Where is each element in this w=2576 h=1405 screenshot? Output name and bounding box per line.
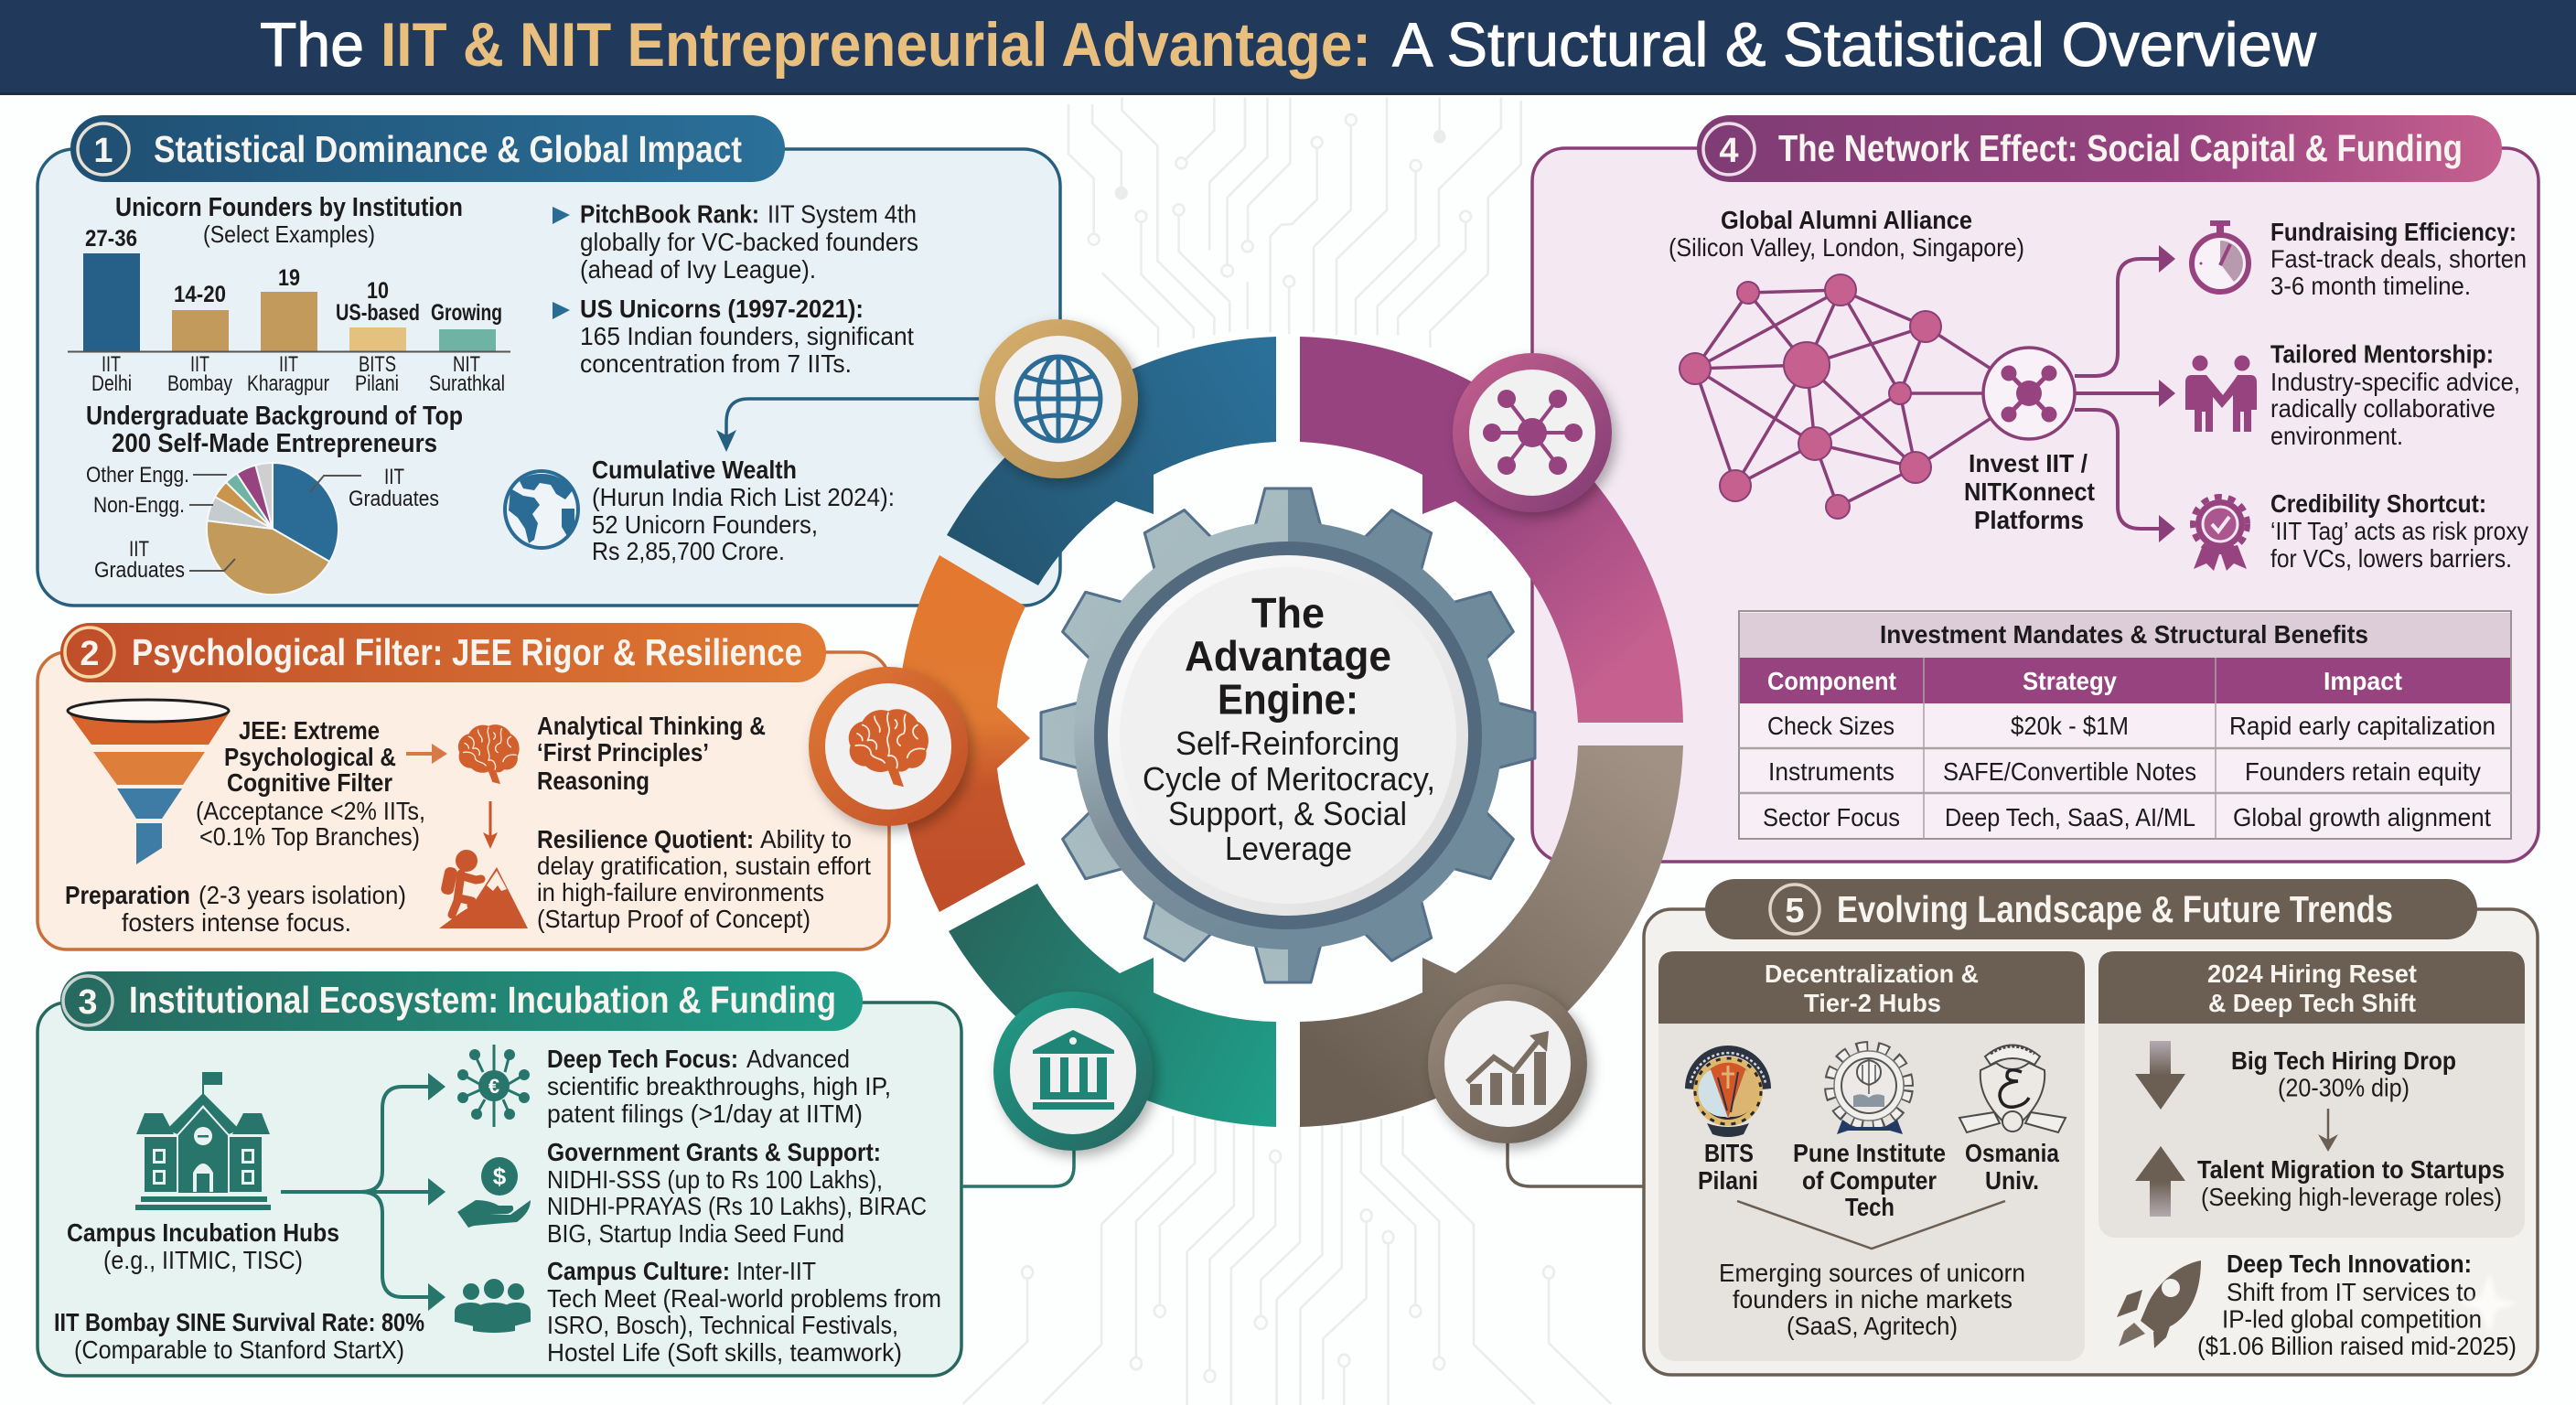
segment: evolving (brown): [1300, 745, 1683, 1127]
table: investment mandates: Component: [1767, 667, 1896, 695]
arrow: talent up: [2135, 1146, 2185, 1217]
table: investment mandates: $20k - $1M: [2011, 712, 2129, 740]
sub-panel: 2024 hiring reset: 2024 Hiring Reset: [2207, 960, 2417, 988]
heading pill 5: [1705, 879, 2477, 939]
bar chart: unicorn founders by institution: Delhi: [91, 371, 132, 396]
text block: global alumni alliance: Global Alumni Alliance: [1721, 206, 1972, 234]
heading pill 3: 3: [78, 983, 98, 1022]
text block: JEE filter: [196, 716, 425, 851]
icon: rosette badge: [2193, 497, 2248, 571]
connector lines: badges to lower panels: [961, 1143, 1644, 1186]
text block: deep tech focus: Advanced: [746, 1045, 850, 1073]
panel 4: the network effect: [1532, 115, 2538, 862]
title banner: [0, 0, 2576, 95]
bar chart: unicorn founders by institution: US-based: [336, 300, 420, 326]
text block: tailored mentorship: Tailored Mentorship:: [2270, 340, 2494, 368]
pie chart: undergraduate background: Undergraduate Background of Top: [86, 402, 463, 431]
text: institution names: Tech: [1845, 1193, 1894, 1221]
text block: preparation: fosters intense focus.: [122, 908, 351, 937]
text block: fundraising efficiency: [2270, 218, 2527, 300]
table: investment mandates: Investment Mandates & Structural Benefits: [1880, 620, 2368, 649]
heading pill 2: 2: [80, 635, 100, 673]
text block: government grants: [547, 1138, 927, 1248]
text block: cumulative wealth: (Hurun India Rich List 2024):: [592, 483, 895, 511]
text block: invest IIT platforms: Invest IIT /: [1969, 449, 2088, 477]
text block: US unicorns: concentration from 7 IITs.: [580, 349, 852, 378]
arrow: globe badge to cumulative wealth: [716, 399, 983, 452]
text block: PitchBook rank: [553, 199, 918, 284]
badge: network: [1453, 353, 1612, 512]
bar chart: unicorn founders by institution: IIT: [279, 352, 298, 377]
icon: money in hand: [457, 1157, 531, 1228]
text block: credibility shortcut: Credibility Shortcut:: [2270, 489, 2486, 518]
text block: fundraising efficiency: Fundraising Efficiency:: [2270, 218, 2517, 246]
heading pill 2: [60, 623, 826, 682]
text block: preparation: Preparation: [65, 881, 190, 909]
pie chart: undergraduate background: Graduates: [94, 558, 185, 583]
segment: institutional (green): [949, 884, 1276, 1127]
bar chart: unicorn founders by institution: Bombay: [167, 371, 232, 396]
text: emerging sources: [1719, 1259, 2025, 1340]
text block: campus incubation hubs: (e.g., IITMIC, TISC): [103, 1246, 303, 1274]
bar chart: unicorn founders by institution: 19: [278, 265, 300, 291]
icon: campus building: [135, 1072, 271, 1210]
badge: bank: [993, 992, 1153, 1151]
text block: PitchBook rank: (ahead of Ivy League).: [580, 255, 816, 284]
text block: credibility shortcut: ‘IIT Tag’ acts as risk proxy: [2270, 517, 2528, 545]
text block: analytical thinking: Reasoning: [537, 767, 649, 795]
text block: SINE survival rate: (Comparable to Stanford StartX): [74, 1335, 404, 1364]
pie chart: undergraduate background: 200 Self-Made Entrepreneurs: [112, 429, 437, 458]
table: investment mandates: Strategy: [2023, 667, 2117, 695]
text block: government grants: BIG, Startup India Seed Fund: [547, 1219, 844, 1248]
bar chart: unicorn founders by institution: IIT: [190, 352, 209, 377]
bar chart: unicorn founders by institution: Unicorn Founders by Institution: [115, 193, 463, 222]
badge: globe: [979, 319, 1138, 478]
text block: preparation: [65, 881, 406, 937]
pie chart: undergraduate background: Graduates: [349, 487, 439, 511]
logo: BITS Pilani: [1685, 1046, 1771, 1137]
heading pill 4: 4: [1719, 132, 1739, 170]
panel 1: statistical dominance: [38, 115, 1060, 606]
sub-panel: 2024 hiring reset: [2098, 951, 2525, 1238]
text block: cumulative wealth: Cumulative Wealth: [592, 456, 797, 484]
table: investment mandates: Sector Focus: [1763, 803, 1900, 831]
text block: deep tech innovation: Shift from IT services to: [2227, 1278, 2476, 1306]
central gear: [1041, 488, 1535, 982]
table: investment mandates: Deep Tech, SaaS, AI/ML: [1945, 803, 2195, 831]
text block: tailored mentorship: [2270, 340, 2520, 450]
text block: SINE survival rate: IIT Bombay SINE Survival Rate: 80%: [54, 1308, 424, 1336]
text block: campus culture: Campus Culture:: [547, 1257, 730, 1285]
icon: deep tech network: [457, 1045, 530, 1127]
text block: global alumni alliance: (Silicon Valley, London, Singapore): [1669, 233, 2024, 262]
heading pill 5: Evolving Landscape & Future Trends: [1837, 888, 2393, 930]
text: talent migration: [2197, 1155, 2505, 1211]
heading pill 1: Statistical Dominance & Global Impact: [154, 128, 742, 170]
pie chart: undergraduate background: Non-Engg.: [93, 493, 185, 518]
text: institution names: Univ.: [1985, 1166, 2039, 1195]
logo: Osmania University: [1959, 1045, 2066, 1132]
text block: analytical thinking: [537, 712, 766, 795]
icon: rocket: [2117, 1260, 2201, 1348]
text block: deep tech innovation: ($1.06 Billion raised mid-2025): [2197, 1332, 2517, 1360]
text block: government grants: NIDHI-SSS (up to Rs 100 Lakhs),: [547, 1165, 883, 1194]
table: investment mandates: Founders retain equity: [2245, 757, 2481, 786]
text: big tech hiring drop: [2231, 1046, 2456, 1101]
text block: US unicorns: 165 Indian founders, significant: [580, 322, 914, 350]
text block: campus incubation hubs: Campus Incubation Hubs: [67, 1218, 339, 1247]
arrows: hubs to three pillars: [281, 1073, 445, 1311]
pie chart: undergraduate background: [86, 402, 463, 595]
pie chart: undergraduate background: IIT: [129, 537, 149, 562]
text block: global alumni alliance: [1669, 206, 2024, 262]
text block: credibility shortcut: [2270, 489, 2528, 573]
table: investment mandates: Rapid early capitalization: [2229, 712, 2496, 740]
bar chart: unicorn founders by institution: 10: [367, 278, 389, 304]
text block: deep tech innovation: Deep Tech Innovation:: [2227, 1249, 2472, 1278]
text block: deep tech focus: Deep Tech Focus:: [547, 1045, 738, 1073]
text block: JEE filter: JEE: Extreme: [239, 716, 380, 745]
text: institution names: BITS: [1704, 1139, 1754, 1167]
badge: brain: [809, 667, 968, 826]
text block: SINE survival rate: [54, 1308, 424, 1364]
text block: deep tech innovation: [2197, 1249, 2517, 1360]
icon: platform hub: [1983, 348, 2075, 439]
icon: stopwatch: [2192, 220, 2249, 292]
icon: money in hand: $: [493, 1163, 507, 1190]
bar chart: unicorn founders by institution: 27-36: [85, 226, 137, 252]
text block: campus culture: Inter-IIT: [736, 1257, 816, 1285]
text block: campus culture: ISRO, Bosch), Technical Festivals,: [547, 1311, 898, 1339]
text block: resilience quotient: in high-failure environments: [537, 878, 824, 906]
bar chart: unicorn founders by institution: (Select Examples): [203, 220, 375, 248]
segment: network (purple): [1300, 337, 1683, 723]
badge: growth chart: [1428, 984, 1587, 1143]
text: big tech hiring drop: Big Tech Hiring Drop: [2231, 1046, 2456, 1075]
arrow: drop to migration: [2318, 1109, 2338, 1152]
heading pill 1: 1: [93, 132, 113, 170]
arrow: hiring down: [2135, 1041, 2185, 1110]
table: investment mandates: Check Sizes: [1767, 712, 1894, 740]
text block: resilience quotient: (Startup Proof of Concept): [537, 905, 810, 933]
bar chart: unicorn founders by institution: 14-20: [174, 282, 226, 307]
text: institution names: of Computer: [1802, 1166, 1937, 1195]
icon: handshake mentors: [2185, 355, 2257, 432]
text block: campus culture: Hostel Life (Soft skills, teamwork): [547, 1338, 902, 1367]
sub-panel: decentralization and tier-2 hubs: Decentralization &: [1765, 960, 1979, 988]
segment: statistical (blue): [947, 337, 1276, 585]
text block: cumulative wealth: 52 Unicorn Founders,: [592, 510, 818, 539]
sub-panel: 2024 hiring reset: & Deep Tech Shift: [2208, 989, 2416, 1017]
heading pill 3: Institutional Ecosystem: Incubation & Funding: [129, 979, 836, 1021]
text block: government grants: NIDHI-PRAYAS (Rs 10 Lakhs), BIRAC: [547, 1192, 927, 1220]
bar chart: unicorn founders by institution: BITS: [359, 352, 396, 377]
bar chart: unicorn founders by institution: Kharagpur: [247, 371, 329, 396]
text block: government grants: Government Grants & Support:: [547, 1138, 881, 1166]
text block: deep tech focus: patent filings (>1/day at IITM): [547, 1099, 863, 1128]
bar chart: unicorn founders by institution: [68, 193, 510, 396]
background circuit pattern: top: [1068, 98, 1521, 348]
text block: JEE filter: (Acceptance <2% IITs,: [196, 797, 425, 825]
bar chart: unicorn founders by institution: NIT: [453, 352, 480, 377]
heading pill 4: [1697, 115, 2502, 182]
title banner: IIT & NIT Entrepreneurial Advantage:: [381, 10, 1371, 80]
background circuit pattern: bottom: [962, 1116, 1611, 1405]
text: institution names: Pune Institute: [1793, 1139, 1946, 1167]
text: institution names: [1698, 1139, 2059, 1221]
text: emerging sources: (SaaS, Agritech): [1787, 1312, 1958, 1340]
title banner: A Structural & Statistical Overview: [1392, 10, 2317, 80]
text: big tech hiring drop: (20-30% dip): [2278, 1074, 2410, 1101]
text block: tailored mentorship: Industry-specific advice,: [2270, 368, 2520, 396]
table: investment mandates: SAFE/Convertible Notes: [1943, 757, 2196, 786]
panel 3: institutional ecosystem: [38, 971, 961, 1376]
heading pill 1: [70, 115, 785, 182]
text block: JEE filter: Psychological &: [224, 743, 396, 771]
text: institution names: Pilani: [1698, 1166, 1758, 1195]
centre text: Support, & Social: [1168, 795, 1407, 832]
text block: invest IIT platforms: NITKonnect: [1964, 477, 2095, 506]
text block: resilience quotient: Resilience Quotient:: [537, 825, 754, 853]
text block: invest IIT platforms: Platforms: [1974, 506, 2084, 534]
bar chart: unicorn founders by institution: IIT: [102, 352, 121, 377]
text block: tailored mentorship: radically collaborative: [2270, 394, 2496, 423]
heading pill 5: 5: [1785, 892, 1805, 930]
pie chart: undergraduate background: IIT: [384, 465, 404, 489]
text block: analytical thinking: ‘First Principles’: [537, 738, 709, 767]
sub-panel: decentralization and tier-2 hubs: [1658, 951, 2085, 1361]
centre text: Self-Reinforcing: [1175, 724, 1400, 762]
text block: campus culture: [547, 1257, 941, 1367]
segment: psychological (orange): [896, 555, 1030, 912]
text: institution names: Osmania: [1965, 1139, 2059, 1167]
table: investment mandates: Instruments: [1768, 757, 1894, 786]
centre text: Cycle of Meritocracy,: [1143, 760, 1435, 798]
text block: invest IIT platforms: [1964, 449, 2095, 534]
sub-panel: decentralization and tier-2 hubs: Tier-2 Hubs: [1804, 989, 1941, 1017]
bar chart: unicorn founders by institution: Pilani: [355, 371, 399, 396]
heading pill 2: Psychological Filter: JEE Rigor & Resilience: [132, 631, 802, 673]
table: investment mandates: Impact: [2324, 667, 2402, 695]
text block: JEE filter: <0.1% Top Branches): [199, 822, 420, 851]
centre text: Leverage: [1225, 830, 1352, 867]
centre text: Advantage: [1185, 632, 1391, 680]
text block: preparation: (2-3 years isolation): [199, 881, 406, 909]
text block: US unicorns: US Unicorns (1997-2021):: [580, 295, 864, 323]
text block: fundraising efficiency: 3-6 month timeline.: [2270, 272, 2471, 300]
title banner: The: [260, 10, 364, 80]
icon: people group: [455, 1279, 531, 1333]
table: investment mandates: [1739, 611, 2511, 839]
text block: deep tech focus: scientific breakthroughs, high IP,: [547, 1072, 891, 1100]
heading pill 3: [60, 971, 863, 1031]
text block: US unicorns: [553, 295, 914, 378]
text block: analytical thinking: Analytical Thinking &: [537, 712, 766, 740]
text block: deep tech innovation: IP-led global competition: [2222, 1304, 2482, 1334]
text block: cumulative wealth: [592, 456, 895, 565]
text block: fundraising efficiency: Fast-track deals, shorten: [2270, 245, 2527, 273]
text block: PitchBook rank: IIT System 4th: [767, 199, 917, 229]
text block: JEE filter: Cognitive Filter: [227, 768, 392, 797]
text block: resilience quotient: [537, 825, 871, 933]
arrow: JEE to analytical thinking: [406, 744, 447, 764]
text block: PitchBook rank: globally for VC-backed founders: [580, 228, 918, 256]
text block: campus incubation hubs: [67, 1218, 339, 1274]
network graph: alumni nodes: [1680, 274, 2029, 519]
text block: credibility shortcut: for VCs, lowers barriers.: [2270, 544, 2512, 573]
centre text: [1143, 589, 1435, 867]
text block: deep tech focus: [547, 1045, 891, 1128]
text block: resilience quotient: Ability to: [760, 825, 852, 853]
heading pill 4: The Network Effect: Social Capital & Funding: [1778, 127, 2463, 169]
icon: deep tech network: €: [488, 1075, 499, 1098]
centre text: Engine:: [1218, 675, 1358, 723]
table: investment mandates: Global growth alignment: [2233, 803, 2491, 831]
centre text: The: [1251, 589, 1325, 637]
text block: cumulative wealth: Rs 2,85,700 Crore.: [592, 537, 785, 565]
text block: PitchBook rank: PitchBook Rank:: [580, 199, 759, 229]
bar chart: unicorn founders by institution: Surathkal: [429, 371, 505, 396]
arrow: brain to resilience: [483, 801, 498, 849]
chevron connector: [1737, 1201, 2005, 1249]
arrows: hub to three benefits: [2075, 245, 2175, 542]
sparkle overlay: [2459, 1272, 2517, 1335]
pie chart: undergraduate background: Other Engg.: [86, 463, 189, 488]
icon: climber on mountain: [439, 850, 528, 928]
text: emerging sources: founders in niche markets: [1733, 1285, 2012, 1314]
text: emerging sources: Emerging sources of unicorn: [1719, 1259, 2025, 1287]
text block: campus culture: Tech Meet (Real-world problems from: [547, 1284, 941, 1313]
bar chart: unicorn founders by institution: Growing: [431, 300, 502, 326]
icon: small brain: [458, 724, 520, 784]
engine ring segments: [896, 337, 1683, 1127]
text block: tailored mentorship: environment.: [2270, 422, 2403, 450]
text: talent migration: Talent Migration to Startups: [2197, 1155, 2505, 1184]
icon: world globe: [505, 471, 578, 548]
panel 5: evolving landscape: [1644, 879, 2538, 1375]
icon: funnel: [67, 700, 231, 864]
panel 2: psychological filter: [38, 623, 889, 949]
logo: Pune Institute of Computer Technology: [1824, 1041, 1914, 1134]
text block: resilience quotient: delay gratification, sustain effort: [537, 852, 871, 880]
text: talent migration: (Seeking high-leverage roles): [2201, 1183, 2502, 1211]
